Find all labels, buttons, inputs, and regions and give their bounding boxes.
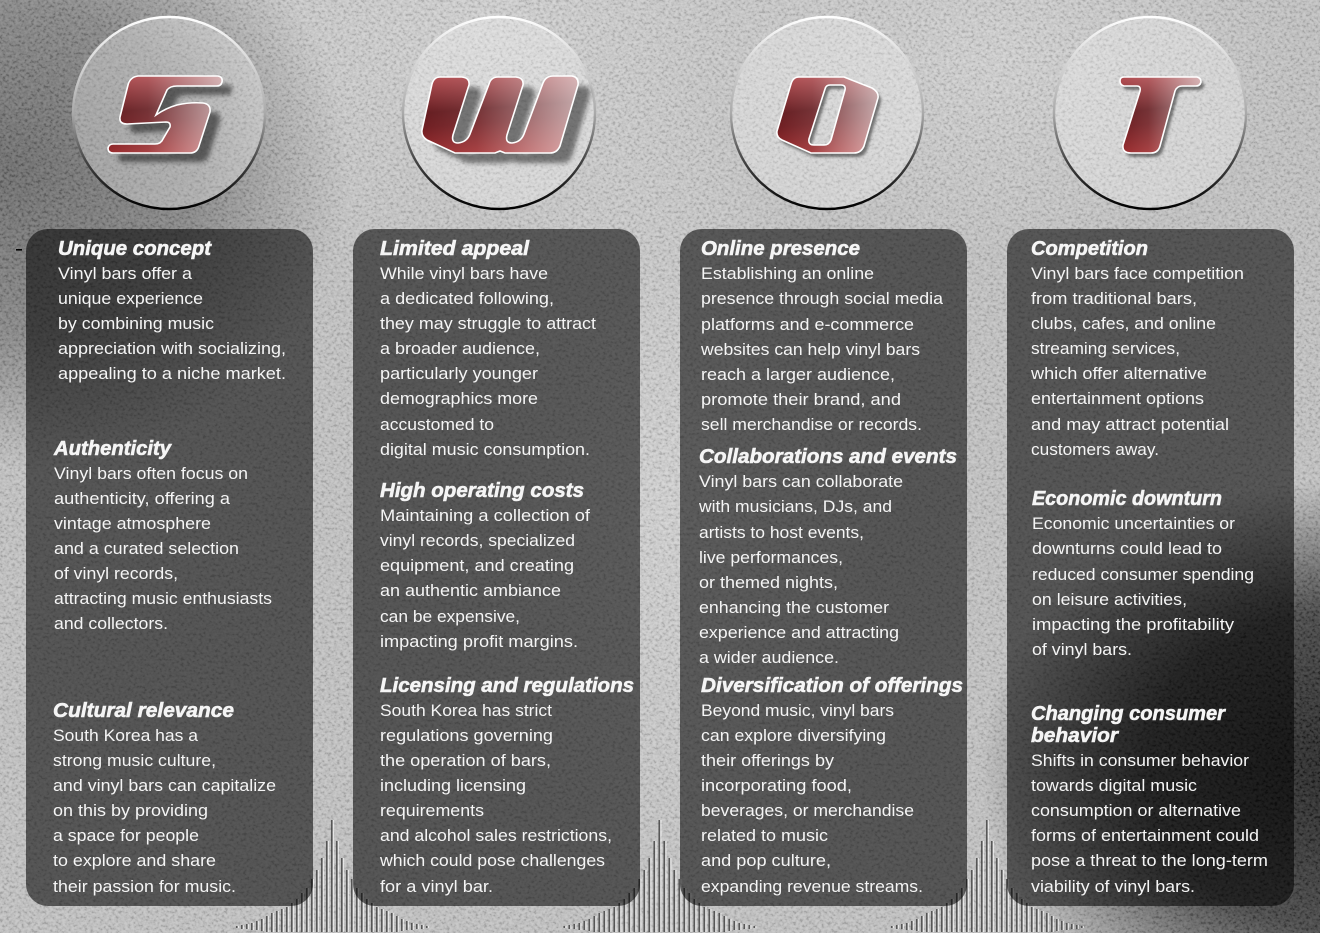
text block: Diversification of offerings [701, 701, 923, 896]
text block: Economic downturn: reduced consumer spending [1032, 565, 1254, 584]
text block: Diversification of offerings: expanding revenue streams. [701, 877, 923, 896]
panel: threats [1007, 229, 1294, 906]
text block: Authenticity: attracting music enthusiasts [54, 589, 272, 608]
heading: Unique concept: Unique concept [58, 238, 212, 260]
text block: Unique concept: by combining music [58, 314, 215, 333]
heading: Licensing and regulations: Licensing and regulations [380, 675, 634, 697]
heading: Changing consumer behavior [1031, 703, 1226, 747]
text block: Competition [1030, 264, 1244, 459]
text block: Collaborations and events: or themed nights, [699, 573, 838, 592]
text block: Diversification of offerings: beverages, or merchandise [701, 801, 914, 820]
text block: Competition: streaming services, [1031, 339, 1180, 358]
text block: Licensing and regulations: South Korea has strict [380, 701, 552, 720]
text block: Collaborations and events: Vinyl bars can collaborate [699, 472, 903, 491]
text block: Online presence: promote their brand, and [701, 390, 901, 409]
text block: Diversification of offerings: can explore diversifying [701, 726, 886, 745]
heading: High operating costs: High operating costs [380, 480, 584, 502]
text block: Online presence: Establishing an online [701, 264, 874, 283]
heading: Changing consumer behavior: behavior [1031, 725, 1119, 747]
text block: Limited appeal: While vinyl bars have [380, 264, 548, 283]
text block: Cultural relevance: strong music culture, [53, 751, 216, 770]
text block: Licensing and regulations: for a vinyl bar. [380, 877, 493, 896]
text block: Economic downturn: of vinyl bars. [1032, 640, 1132, 659]
text block: High operating costs: vinyl records, specialized [380, 531, 575, 550]
text block: Authenticity: and a curated selection [54, 539, 239, 558]
text block: Diversification of offerings: their offerings by [701, 751, 835, 770]
text block: Licensing and regulations: requirements [380, 801, 484, 820]
text block: Limited appeal: particularly younger [380, 364, 538, 383]
text block: Economic downturn: on leisure activities, [1032, 590, 1187, 609]
text block: Cultural relevance: a space for people [53, 826, 199, 845]
heading: Limited appeal: Limited appeal [380, 238, 529, 260]
text block: Changing consumer behavior: pose a threat to the long-term [1031, 851, 1268, 870]
text block: Authenticity: authenticity, offering a [54, 489, 231, 508]
text block: Diversification of offerings: and pop culture, [701, 851, 831, 870]
text block: Diversification of offerings: Beyond music, vinyl bars [701, 701, 894, 720]
text block: Licensing and regulations [379, 701, 612, 896]
text block: Cultural relevance [53, 726, 276, 896]
text block: Unique concept: unique experience [58, 289, 203, 308]
text block: Economic downturn [1032, 514, 1254, 659]
text block: Cultural relevance: their passion for music. [53, 877, 236, 896]
text block: Authenticity [54, 464, 272, 633]
panel: strengths [26, 229, 313, 906]
heading: Changing consumer behavior: Changing consumer [1031, 703, 1226, 725]
text block: Competition: entertainment options [1031, 389, 1204, 408]
heading: Authenticity: Authenticity [53, 438, 172, 460]
icon: letter O badge [731, 17, 923, 209]
text block: Collaborations and events: enhancing the customer [699, 598, 889, 617]
text block: Limited appeal: demographics more [380, 389, 538, 408]
icon: letter S badge [73, 17, 265, 209]
text block: Competition: from traditional bars, [1031, 289, 1197, 308]
text block: Authenticity: vintage atmosphere [54, 514, 211, 533]
text block: Competition: customers away. [1031, 440, 1159, 459]
text block: Limited appeal: a broader audience, [380, 339, 540, 358]
text block: High operating costs: can be expensive, [380, 607, 520, 626]
text block: Authenticity: Vinyl bars often focus on [54, 464, 248, 483]
text block: Changing consumer behavior: Shifts in consumer behavior [1031, 751, 1249, 770]
heading: Collaborations and events: Collaborations and events [699, 446, 957, 468]
text block: High operating costs: Maintaining a collection of [380, 506, 590, 525]
text block: Cultural relevance: and vinyl bars can capitalize [53, 776, 276, 795]
heading: Economic downturn: Economic downturn [1032, 488, 1222, 510]
heading: Cultural relevance: Cultural relevance [53, 700, 234, 722]
text block: Competition: Vinyl bars face competition [1031, 264, 1244, 283]
text block: Licensing and regulations: which could pose challenges [379, 851, 605, 870]
waveform decorations [237, 820, 1083, 932]
text block: Collaborations and events: artists to host events, [699, 523, 864, 542]
text block: Cultural relevance: to explore and share [53, 851, 216, 870]
text block: Authenticity: and collectors. [54, 614, 168, 633]
text block: Limited appeal: digital music consumption. [380, 440, 590, 459]
text block: Changing consumer behavior [1031, 751, 1268, 896]
heading: Online presence: Online presence [701, 238, 860, 260]
stray dash mark [16, 249, 22, 251]
heading: Competition: Competition [1031, 238, 1148, 260]
text block: Collaborations and events: live performances, [699, 548, 843, 567]
text block: Limited appeal [380, 264, 596, 459]
text block: Authenticity: of vinyl records, [54, 564, 178, 583]
text block: High operating costs [380, 506, 590, 651]
panel: weaknesses [353, 229, 640, 906]
text block: Cultural relevance: South Korea has a [53, 726, 199, 745]
text block: Competition: which offer alternative [1030, 364, 1207, 383]
text block: Limited appeal: they may struggle to attract [380, 314, 596, 333]
text block: Limited appeal: accustomed to [380, 415, 494, 434]
text block: Diversification of offerings: incorporating food, [701, 776, 852, 795]
text block: Economic downturn: Economic uncertainties or [1032, 514, 1235, 533]
text block: Online presence: platforms and e-commerce [701, 315, 914, 334]
icon: letter T badge [1054, 17, 1246, 209]
text block: Unique concept: Vinyl bars offer a [58, 264, 193, 283]
text block: Licensing and regulations: including licensing [380, 776, 526, 795]
text block: Collaborations and events: a wider audience. [699, 648, 839, 667]
text block: Collaborations and events [698, 472, 903, 667]
text block: Online presence: websites can help vinyl bars [700, 340, 920, 359]
text block: Licensing and regulations: the operation of bars, [380, 751, 551, 770]
text block: Collaborations and events: with musicians, DJs, and [698, 497, 892, 516]
text block: Licensing and regulations: and alcohol sales restrictions, [380, 826, 612, 845]
text block: High operating costs: impacting profit margins. [380, 632, 578, 651]
text block: Limited appeal: a dedicated following, [380, 289, 554, 308]
text block: Licensing and regulations: regulations governing [380, 726, 553, 745]
text block: Unique concept: appreciation with socializing, [58, 339, 286, 358]
text block: Online presence: reach a larger audience, [701, 365, 895, 384]
text block: Economic downturn: impacting the profitability [1032, 615, 1235, 634]
heading: Diversification of offerings: Diversification of offerings [701, 675, 963, 697]
text block: Economic downturn: downturns could lead to [1032, 539, 1222, 558]
text block: Collaborations and events: experience and attracting [699, 623, 899, 642]
text block: Competition: and may attract potential [1031, 415, 1229, 434]
text block: High operating costs: equipment, and creating [380, 556, 574, 575]
text block: Online presence [700, 264, 944, 434]
text block: Online presence: sell merchandise or records. [701, 415, 922, 434]
panel: opportunities [680, 229, 967, 906]
text block: Cultural relevance: on this by providing [53, 801, 208, 820]
text block: Changing consumer behavior: consumption or alternative [1031, 801, 1241, 820]
text block: High operating costs: an authentic ambiance [380, 581, 561, 600]
icon: letter W badge [403, 17, 595, 209]
text block: Unique concept [58, 264, 286, 383]
text block: Changing consumer behavior: forms of entertainment could [1031, 826, 1259, 845]
text block: Competition: clubs, cafes, and online [1031, 314, 1216, 333]
text block: Changing consumer behavior: towards digital music [1031, 776, 1198, 795]
text block: Diversification of offerings: related to music [701, 826, 829, 845]
text block: Unique concept: appealing to a niche market. [58, 364, 286, 383]
text block: Online presence: presence through social media [701, 289, 944, 308]
text block: Changing consumer behavior: viability of vinyl bars. [1031, 877, 1195, 896]
